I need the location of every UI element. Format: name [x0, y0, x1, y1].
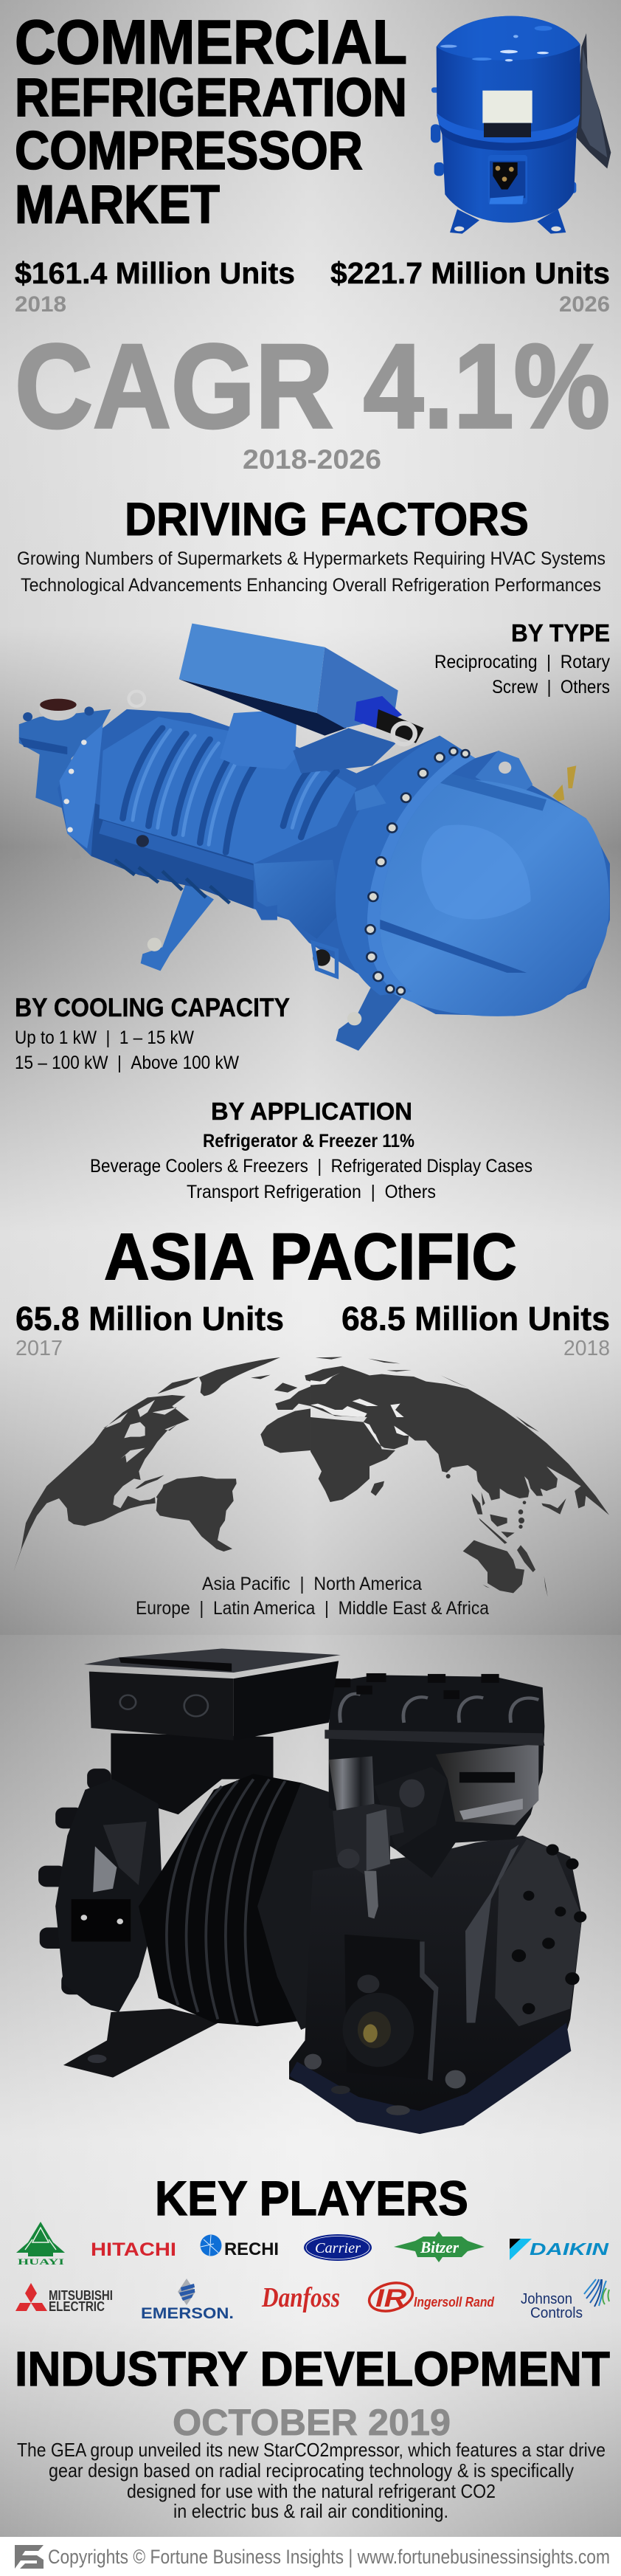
- stat: Asia Pacific 2017: [15, 1300, 284, 1360]
- footer bar: [0, 2537, 621, 2576]
- regions list: Asia Pacific | North America: [202, 1574, 422, 1594]
- footer logo: [15, 2545, 44, 2569]
- regions list: [136, 1574, 489, 1619]
- logo: Ingersoll Rand: [366, 2279, 495, 2315]
- by cooling capacity: Up to 1 kW | 1 – 15 kW: [15, 1027, 194, 1048]
- heading: Asia Pacific: ASIA PACIFIC: [104, 1219, 517, 1293]
- title: [15, 7, 407, 235]
- driving factors text: [17, 548, 606, 596]
- logo: Huayi: HUAYI: [18, 2256, 65, 2267]
- logo: Emerson: EMERSON.: [141, 2305, 234, 2322]
- stat: 2018 market size: [15, 256, 295, 317]
- logo: Hitachi: HITACHI: [91, 2239, 176, 2260]
- heading: driving factors: DRIVING FACTORS: [125, 494, 529, 545]
- logo: Johnson Controls: Controls: [530, 2305, 583, 2321]
- by cooling capacity: BY COOLING CAPACITY: [15, 993, 290, 1022]
- logo: Carrier: [304, 2234, 372, 2261]
- stat: 2026 market size: [330, 256, 610, 317]
- logo: Daikin: [510, 2239, 609, 2260]
- regions list: Europe | Latin America | Middle East & Africa: [136, 1598, 489, 1619]
- logo: Johnson Controls: Johnson: [521, 2291, 572, 2307]
- logo: Johnson Controls: [521, 2279, 609, 2321]
- development description: gear design based on radial reciprocating technology & is specifically: [49, 2459, 574, 2482]
- by type: BY TYPE: [511, 619, 610, 647]
- by application: Beverage Coolers & Freezers | Refrigerated Display Cases: [90, 1156, 532, 1177]
- by type: Screw | Others: [492, 677, 610, 698]
- date: OCTOBER 2019: [173, 2402, 451, 2443]
- stat: 2018 market size: $161.4 Million Units: [15, 256, 295, 290]
- title: COMMERCIAL: [15, 7, 407, 77]
- title: COMPRESSOR: [15, 121, 363, 181]
- logo: Bitzer: Bitzer: [420, 2238, 459, 2256]
- image: blue scroll compressor: [431, 16, 611, 234]
- logo: Rechi: RECHI: [224, 2239, 279, 2259]
- stat: Asia Pacific 2017: 2017: [15, 1337, 63, 1360]
- by cooling capacity: 15 – 100 kW | Above 100 kW: [15, 1053, 239, 1073]
- logo: Daikin: DAIKIN: [530, 2239, 609, 2259]
- stat: Asia Pacific 2018: 68.5 Million Units: [341, 1300, 610, 1337]
- development description: designed for use with the natural refrigerant CO2: [127, 2480, 496, 2502]
- image: black reciprocating compressor: [38, 1648, 586, 2134]
- logo: Emerson: [141, 2279, 234, 2322]
- logo: Mitsubishi Electric: MITSUBISHI: [49, 2288, 113, 2303]
- stat: Asia Pacific 2017: 65.8 Million Units: [15, 1300, 284, 1337]
- by application: Refrigerator & Freezer 11%: [203, 1131, 414, 1151]
- logo: Ingersoll Rand: IR: [375, 2284, 407, 2312]
- stat: Asia Pacific 2018: [341, 1300, 610, 1360]
- background: upper section: [0, 0, 621, 847]
- logo: Mitsubishi Electric: [15, 2283, 113, 2314]
- silhouette: crankcase: [289, 1836, 582, 2132]
- heading: key players: KEY PLAYERS: [155, 2171, 468, 2225]
- logo: Carrier: Carrier: [315, 2240, 361, 2256]
- logo: Danfoss: Danfoss: [261, 2282, 340, 2313]
- stat: 2018 market size: 2018: [15, 292, 66, 317]
- world map globe: [13, 1357, 609, 1597]
- by cooling capacity: [15, 993, 290, 1073]
- by application: [90, 1098, 532, 1202]
- stat: 2026 market size: $221.7 Million Units: [330, 256, 610, 290]
- by type: [434, 619, 610, 698]
- title: REFRIGERATION: [15, 68, 407, 128]
- by application: Transport Refrigeration | Others: [187, 1182, 436, 1202]
- by type: Reciprocating | Rotary: [434, 652, 610, 672]
- background: lower section: [0, 1635, 621, 2537]
- CAGR period: 2018-2026: [243, 444, 381, 475]
- background: middle section: [0, 847, 621, 1635]
- stat: Asia Pacific 2018: 2018: [563, 1337, 610, 1360]
- logo: Ingersoll Rand: Ingersoll Rand: [414, 2295, 495, 2310]
- logo: Bitzer: [394, 2231, 485, 2262]
- image: blue screw compressor: [19, 624, 610, 1050]
- silhouette of full machine body: [58, 709, 610, 1016]
- title: MARKET: [15, 175, 220, 235]
- logo: Rechi: [201, 2235, 279, 2259]
- logo: Mitsubishi Electric: ELECTRIC: [49, 2299, 105, 2314]
- by application: BY APPLICATION: [211, 1098, 412, 1125]
- development description: [17, 2439, 606, 2522]
- stat: 2026 market size: 2026: [559, 292, 610, 317]
- development description: in electric bus & rail air conditioning.: [173, 2500, 448, 2522]
- logo: Huayi: [16, 2222, 65, 2267]
